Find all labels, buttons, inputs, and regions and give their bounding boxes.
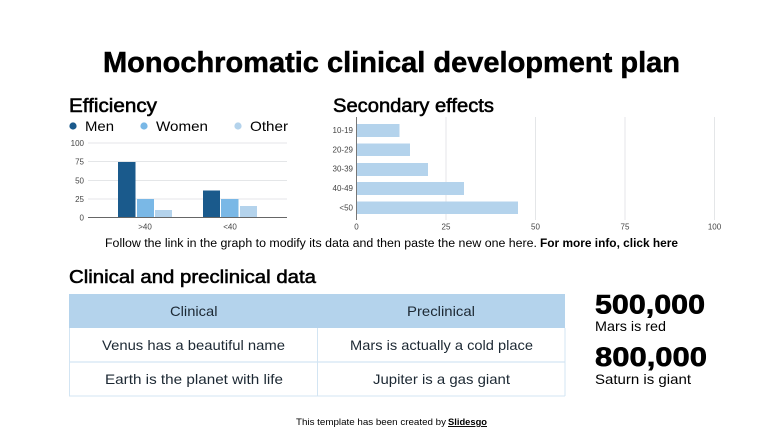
bar chart: efficiency — [71, 139, 287, 232]
stat: 500,000: Mars is red — [595, 318, 666, 334]
bar chart: secondary effects: 20-29 — [333, 146, 354, 154]
legend — [69, 118, 288, 134]
table: Venus has a beautiful name — [102, 337, 285, 353]
legend: Other — [250, 118, 288, 134]
table: Jupiter is a gas giant — [373, 371, 510, 387]
heading: efficiency: Efficiency — [69, 96, 158, 117]
stat: 500,000: 500,000 — [595, 290, 705, 320]
table: Clinical — [170, 303, 218, 319]
legend: Men — [85, 118, 114, 134]
table: Earth is the planet with life — [105, 371, 283, 387]
table: Mars is actually a cold place — [350, 337, 533, 353]
stat: 800,000: 800,000 — [595, 342, 707, 372]
bar chart: efficiency: 100 — [71, 139, 85, 148]
panel: efficiency — [69, 96, 288, 232]
bar chart: efficiency: 75 — [75, 158, 85, 166]
bar chart: secondary effects — [333, 117, 722, 232]
heading: secondary effects: Secondary effects — [333, 96, 494, 117]
bar chart: efficiency: 0 — [80, 214, 85, 222]
legend: Women — [156, 118, 208, 134]
stat: 500,000 — [595, 290, 705, 334]
note text: For more info, click here — [540, 238, 678, 250]
bar chart: secondary effects: 0 — [354, 222, 359, 232]
stat: 800,000: Saturn is giant — [595, 371, 691, 387]
bar chart: secondary effects: 10-19 — [333, 126, 354, 135]
heading: clinical and preclinical data: Clinical and preclinical data — [69, 267, 317, 287]
footer credit: Slidesgo — [448, 417, 487, 428]
bar chart: secondary effects: 100 — [708, 222, 722, 232]
bar chart: secondary effects: 30-39 — [333, 164, 354, 174]
table header — [69, 294, 565, 328]
bar chart: secondary effects: 40-49 — [333, 184, 354, 193]
stat: 800,000 — [595, 342, 707, 387]
panel: secondary effects — [333, 96, 722, 232]
table — [69, 294, 565, 396]
bar chart: efficiency: 25 — [75, 195, 85, 204]
table: Preclinical — [407, 303, 475, 319]
bar chart: secondary effects: 50 — [531, 222, 540, 232]
footer credit: This template has been created by — [296, 417, 446, 428]
bar chart: secondary effects: 25 — [442, 222, 451, 232]
bar chart: secondary effects: <50 — [339, 204, 354, 212]
bar chart: efficiency: 50 — [75, 176, 85, 186]
title: Monochromatic clinical development plan — [103, 47, 680, 79]
bar chart: efficiency: >40 — [138, 222, 152, 232]
bar chart: efficiency: <40 — [223, 222, 237, 232]
note text: Follow the link in the graph to modify its data and then paste the new one here. — [105, 238, 537, 250]
bar chart: secondary effects: 75 — [621, 222, 630, 232]
